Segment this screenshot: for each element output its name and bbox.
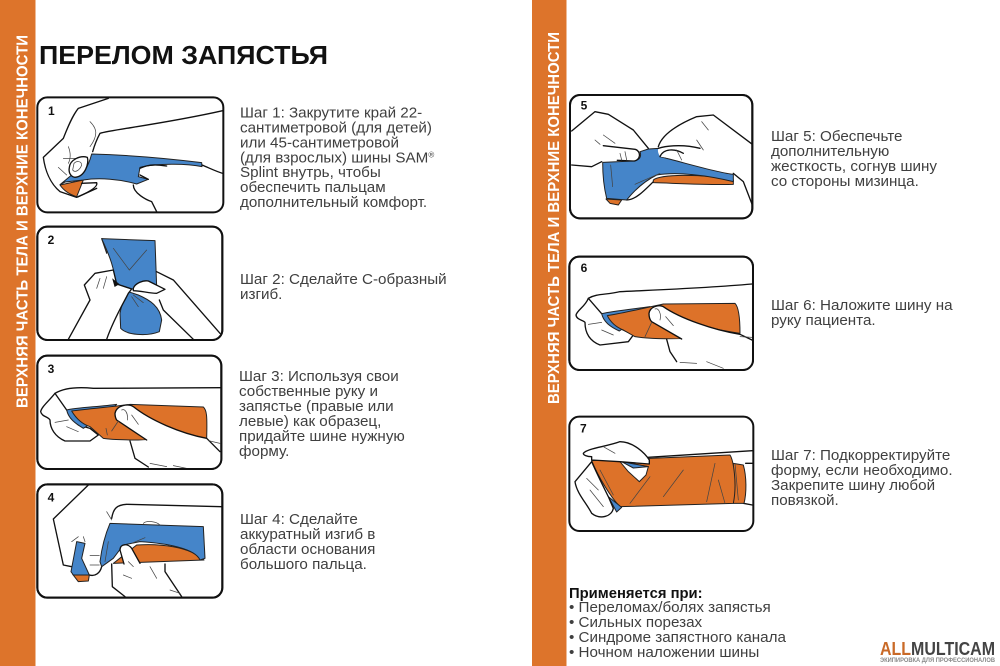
step 7 text: форму, если необходимо. <box>771 462 953 479</box>
panel 7: secure with bandage <box>569 417 753 531</box>
indications list: • Переломах/болях запястья <box>569 599 771 616</box>
indications list: • Сильных порезах <box>569 614 703 631</box>
right orange side bar: ВЕРХНЯЯ ЧАСТЬ ТЕЛА И ВЕРХНИЕ КОНЕЧНОСТИ <box>546 32 563 404</box>
step 1 text: или 45-сантиметровой <box>240 134 399 152</box>
left orange side bar <box>0 0 36 666</box>
step 5 text: жесткость, согнув шину <box>771 158 937 175</box>
panel 3: shape the splint <box>37 356 221 469</box>
step 1 text: ® <box>428 150 434 160</box>
step number 3: 3 <box>48 362 55 376</box>
title: ПЕРЕЛОМ ЗАПЯСТЬЯ <box>39 40 328 70</box>
step number 2: 2 <box>48 233 55 247</box>
step 7 text: Закрепите шину любой <box>771 477 935 494</box>
step 1 text: Шаг 1: Закрутите край 22- <box>240 104 422 122</box>
panel 5: stiffen the splint <box>570 95 752 218</box>
step 4 text: Шаг 4: Сделайте <box>240 511 358 528</box>
step number 1: 1 <box>48 104 55 118</box>
panel 1: curl the splint edge <box>37 97 223 212</box>
step 2 text: Шаг 2: Сделайте С-образный <box>240 271 447 288</box>
step 3 text: Шаг 3: Используя свои <box>239 368 399 385</box>
indications list: • Синдроме запястного канала <box>569 629 786 646</box>
step 4 text: большого пальца. <box>240 556 367 573</box>
step number 6: 6 <box>581 261 588 275</box>
indications list <box>569 586 786 661</box>
panel 2: C-shaped bend <box>37 227 222 340</box>
step 1 text: (для взрослых) шины SAM <box>240 150 434 166</box>
step 4 text: аккуратный изгиб в <box>240 526 375 543</box>
step 6 text: Шаг 6: Наложите шину на <box>771 297 953 314</box>
step number 4: 4 <box>48 491 55 505</box>
logo: ALLMULTICAM: ЭКИПИРОВКА ДЛЯ ПРОФЕССИОНАЛОВ <box>880 658 996 664</box>
indications list: Применяется при: <box>569 586 703 602</box>
panel 4: bend at thumb base <box>37 484 222 598</box>
indications list: • Ночном наложении шины <box>569 644 759 661</box>
step 7 text: Шаг 7: Подкорректируйте <box>771 447 950 464</box>
step 3 text: придайте шине нужную <box>239 428 405 445</box>
step 1 text: Splint внутрь, чтобы <box>240 164 381 181</box>
step 1 text: сантиметровой (для детей) <box>240 120 432 136</box>
step 3 text: левые) как образец, <box>239 413 381 430</box>
step 3 text: форму. <box>239 443 289 460</box>
step 3 text: собственные руку и <box>239 383 378 400</box>
step 1 text: дополнительный комфорт. <box>240 194 427 211</box>
step 6 text: руку пациента. <box>771 312 876 329</box>
left orange side bar: ВЕРХНЯЯ ЧАСТЬ ТЕЛА И ВЕРХНИЕ КОНЕЧНОСТИ <box>14 35 32 408</box>
step 5 text: Шаг 5: Обеспечьте <box>771 128 902 145</box>
step 5 text: дополнительную <box>771 143 889 160</box>
step 7 text: повязкой. <box>771 492 839 509</box>
step 5 text: со стороны мизинца. <box>771 173 919 190</box>
step 3 text: запястье (правые или <box>239 398 394 415</box>
step 1 text: обеспечить пальцам <box>240 179 386 196</box>
right orange side bar <box>532 0 566 666</box>
panel 6: apply the splint <box>569 257 753 370</box>
step number 7: 7 <box>580 421 587 435</box>
step 4 text: области основания <box>240 541 375 558</box>
step 2 text: изгиб. <box>240 286 282 303</box>
step number 5: 5 <box>581 99 588 113</box>
